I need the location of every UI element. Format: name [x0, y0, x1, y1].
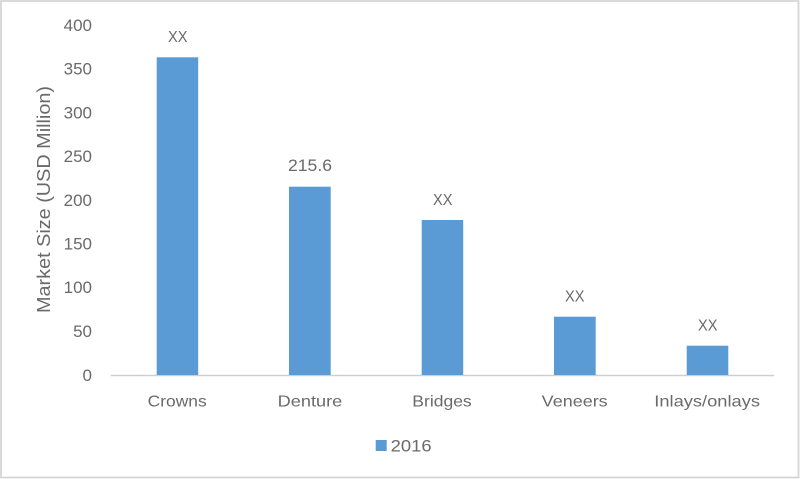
- y axis labels: 100: [64, 278, 92, 297]
- data labels: XX: [565, 289, 585, 306]
- x axis line: [111, 374, 774, 376]
- y axis labels: 350: [64, 60, 92, 79]
- legend: [376, 437, 432, 456]
- y axis labels: 150: [64, 234, 92, 254]
- bars: [157, 57, 728, 375]
- data labels: 215.6: [288, 156, 332, 175]
- y axis labels: 300: [64, 104, 92, 122]
- data labels: XX: [433, 192, 453, 209]
- category labels: Inlays/onlays: [654, 394, 760, 410]
- data labels: XX: [168, 29, 188, 46]
- data labels: XX: [698, 318, 718, 335]
- category labels: Crowns: [148, 394, 207, 410]
- category labels: [148, 394, 760, 410]
- category labels: Veneers: [542, 394, 608, 410]
- y axis labels: 200: [64, 191, 92, 210]
- category labels: Denture: [278, 394, 342, 410]
- data labels: [168, 29, 718, 335]
- legend: 2016: [391, 437, 432, 456]
- category labels: Bridges: [412, 394, 472, 410]
- y axis labels: [64, 16, 92, 385]
- y axis labels: 50: [73, 322, 92, 341]
- y axis labels: 400: [64, 16, 92, 35]
- y axis labels: 0: [83, 366, 92, 385]
- y axis title: Market Size (USD Million): [34, 86, 54, 313]
- y axis labels: 250: [64, 147, 92, 166]
